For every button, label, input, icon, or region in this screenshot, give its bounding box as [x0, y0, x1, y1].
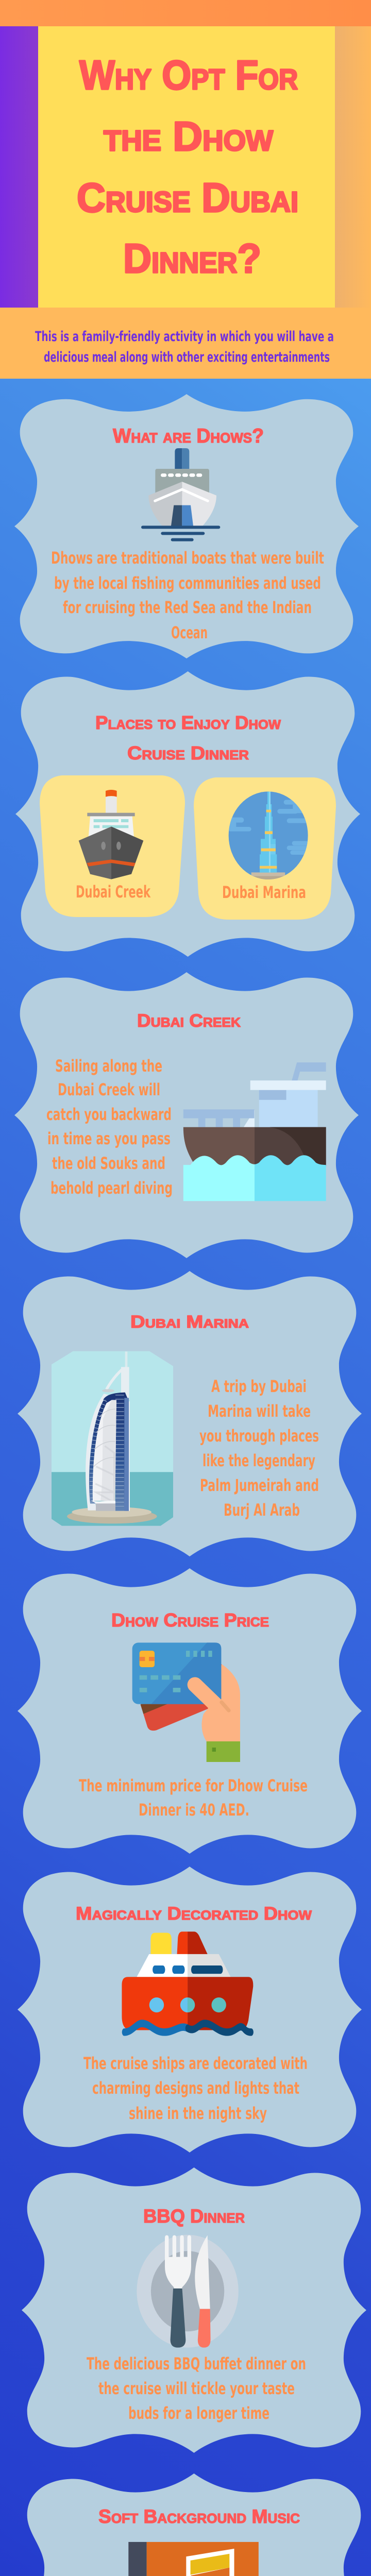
icon: hand holding credit cards	[132, 1642, 240, 1762]
heading: what are dhows: What are Dhows?	[113, 425, 264, 447]
text: dhow cruise price	[79, 1776, 308, 1820]
panel: bbq dinner	[22, 2167, 366, 2453]
text: dubai creek: the old Souks and	[52, 1154, 165, 1173]
card: dubai marina	[194, 777, 336, 920]
heading: places to enjoy: Places to Enjoy Dhow	[95, 712, 281, 733]
title: Cruise Dubai	[77, 175, 298, 221]
panel: soft background music	[22, 2473, 366, 2576]
heading: soft background music: Soft Background Music	[98, 2506, 300, 2527]
text: dubai marina: Burj Al Arab	[224, 1500, 300, 1520]
text: dubai creek: Dubai Creek will	[58, 1080, 160, 1099]
header block	[0, 0, 371, 379]
text: dubai marina: like the legendary	[203, 1451, 315, 1470]
heading: dhow cruise price: Dhow Cruise Price	[111, 1609, 269, 1631]
icon: brown boat on water	[183, 1062, 326, 1201]
text: what are dhows: Ocean	[171, 623, 208, 642]
text: dubai creek: behold pearl diving	[50, 1178, 173, 1198]
text: bbq dinner	[87, 2354, 306, 2423]
illustration: burj al arab	[52, 1351, 173, 1526]
icon: plate with fork and knife	[137, 2235, 239, 2348]
text: bbq dinner: buds for a longer time	[128, 2403, 269, 2423]
heading: bbq dinner: BBQ Dinner	[143, 2206, 245, 2227]
text: dubai creek	[46, 1056, 173, 1198]
text: dubai marina: Marina will take	[208, 1401, 311, 1421]
panel: dubai creek	[14, 972, 359, 1258]
title: Dinner?	[123, 235, 261, 281]
icon: white ship front	[141, 448, 220, 541]
title: Why Opt For	[79, 52, 298, 98]
text: dubai marina: Palm Jumeirah and	[200, 1476, 319, 1495]
text: magically decorated dhow: shine in the night sky	[129, 2104, 267, 2123]
heading: magically decorated dhow: Magically Decorated Dhow	[76, 1904, 312, 1924]
card: dubai creek	[40, 775, 185, 917]
icon: burj tower	[228, 791, 311, 882]
heading: dubai marina: Dubai Marina	[130, 1312, 249, 1332]
panel: dhow cruise price	[18, 1568, 362, 1854]
heading: places to enjoy	[95, 712, 281, 764]
text: dubai creek: in time as you pass	[47, 1129, 171, 1148]
text: dhow cruise price: Dinner is 40 AED.	[139, 1800, 249, 1820]
title	[77, 52, 298, 281]
text: what are dhows	[51, 548, 324, 642]
heading: places to enjoy: Cruise Dinner	[127, 742, 249, 764]
text: dubai marina	[199, 1377, 319, 1520]
label: dubai creek: Dubai Creek	[76, 882, 150, 902]
label: dubai marina: Dubai Marina	[222, 883, 306, 902]
panel: what are dhows	[14, 394, 359, 658]
panel: dubai marina	[18, 1271, 362, 1556]
icon: red ship	[122, 1931, 253, 2032]
text: magically decorated dhow	[83, 2054, 308, 2123]
icon: dark ship	[79, 790, 143, 879]
text: dubai marina: A trip by Dubai	[211, 1377, 307, 1396]
heading: dubai creek: Dubai Creek	[137, 1011, 241, 1031]
text: dubai creek: Sailing along the	[55, 1056, 162, 1076]
panel: places to enjoy	[15, 671, 360, 957]
panel: magically decorated dhow	[18, 1867, 362, 2153]
intro text	[35, 329, 334, 365]
text: dubai creek: catch you backward	[46, 1105, 172, 1124]
title: the Dhow	[104, 113, 273, 159]
icon: music note tile	[128, 2542, 259, 2576]
